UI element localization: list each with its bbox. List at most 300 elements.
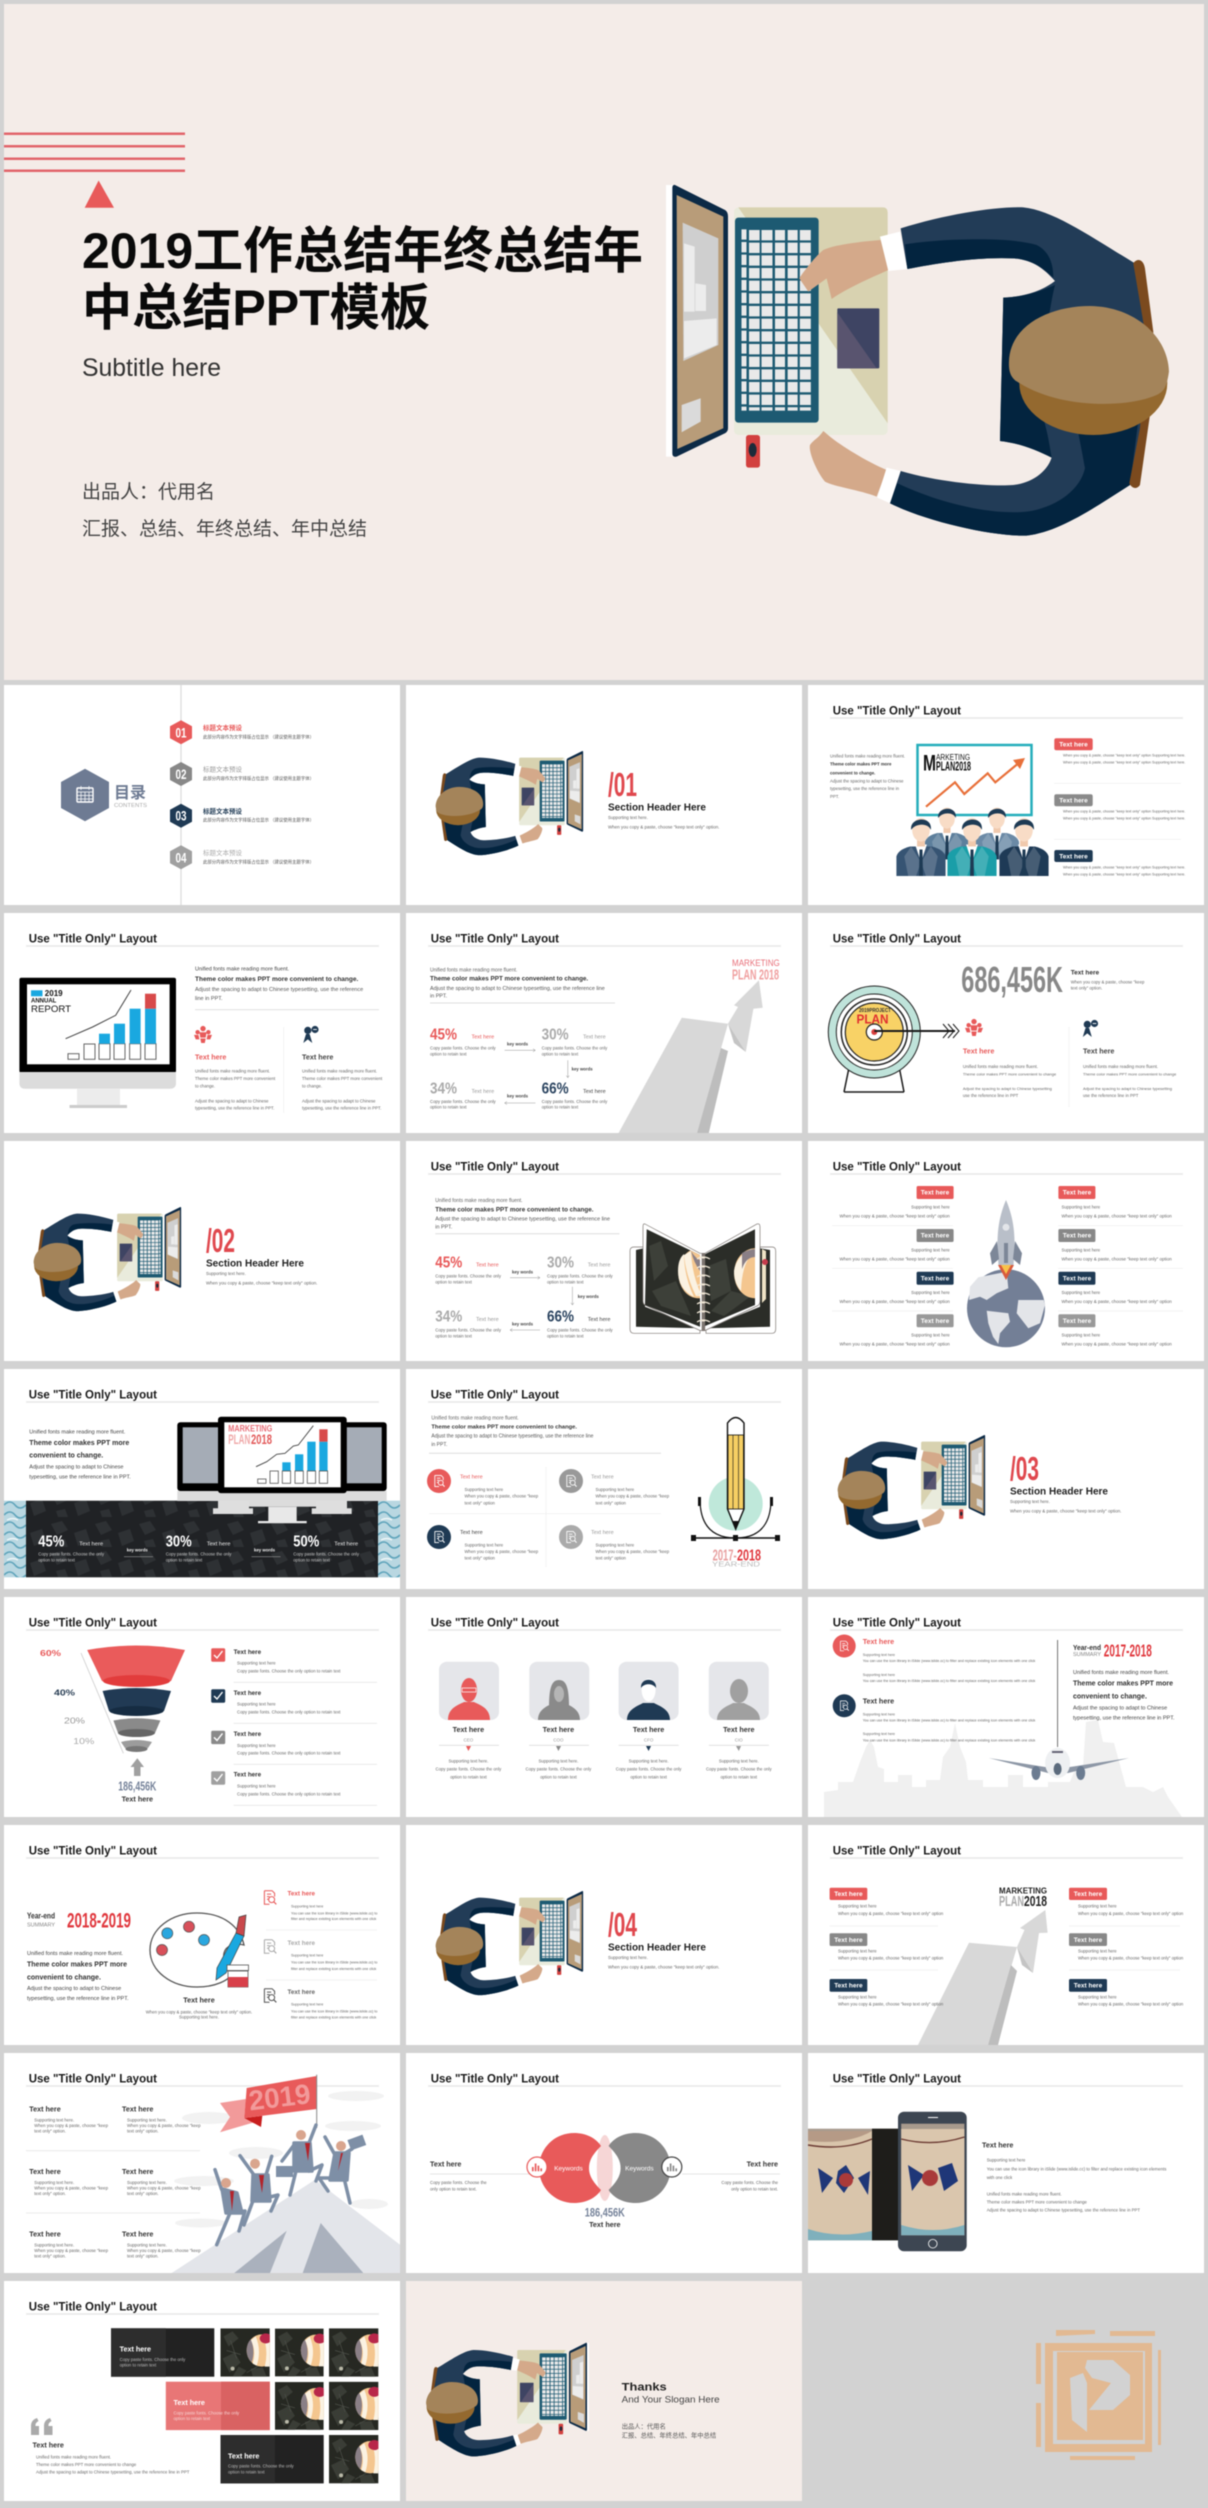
title: Use "Title Only" Layout (833, 933, 961, 945)
tile: dark 2 (220, 2435, 324, 2483)
year heading: SUMMARY (1073, 1652, 1102, 1658)
title: 2019工作总结年终总结年 (82, 223, 643, 279)
stat 30% (542, 1027, 608, 1056)
icon: up arrow (130, 1758, 144, 1776)
monitors illustration (177, 1417, 387, 1523)
keyword shapes: Keywords (554, 2165, 584, 2172)
profile CFO: Copy paste fonts. Choose the only (616, 1766, 682, 1771)
skyline (824, 1720, 1182, 1817)
tile: red: Text here (174, 2398, 205, 2407)
body text: typesetting, use the reference line in (830, 786, 900, 791)
panel: notebook stats (406, 1141, 802, 1361)
item 2: Supporting text here (291, 1954, 323, 1958)
item row 1 right: When you copy & paste, choose "keep (127, 2123, 201, 2128)
item 3: When you copy & paste, choose "keep text only" option Supporting text here. (1063, 873, 1185, 877)
right item 1 (1069, 1888, 1184, 1916)
item 2: When you copy & paste, choose "keep text only" option Supporting text here. (1063, 809, 1185, 813)
quote text: Theme color makes PPT more convenient to change (36, 2462, 137, 2467)
right item 3: When you copy & paste, choose "keep text only" option (1062, 1299, 1172, 1304)
check 2: Text here (234, 1690, 262, 1697)
section heading (206, 1222, 318, 1285)
panel: arrow with side items (808, 1825, 1204, 2045)
keyword shapes: Keywords (625, 2165, 654, 2172)
title: Use "Title Only" Layout (29, 1617, 157, 1629)
block navy: You can use the icon library in iSlide (www.islide.cc) to filter and replace existing icon elements with one click (863, 1738, 1036, 1742)
stat 30% (166, 1534, 232, 1563)
block red: You can use the icon library in iSlide (www.islide.cc) to filter and replace existing icon elements with one click (863, 1659, 1036, 1663)
target illustration: 2019PROJECT (859, 1008, 891, 1014)
palette caption (146, 1995, 252, 2020)
side text: typesetting, use the reference line in PPT. (1073, 1715, 1175, 1721)
column 2: use the reference line in PPT (1083, 1093, 1139, 1098)
intro text: in PPT. (435, 1224, 452, 1230)
chart board: M (923, 751, 936, 776)
section heading: Section Header Here (608, 1943, 706, 1954)
year-end mark: 2018 (737, 1547, 761, 1564)
stat 30%: 30% (542, 1027, 569, 1044)
funnel labels: 40% (54, 1688, 76, 1698)
stat 45%: 45% (38, 1534, 64, 1551)
intro text: Theme color makes PPT more convenient to change. (195, 976, 358, 983)
section heading: /03 (1010, 1450, 1039, 1487)
title (82, 223, 643, 336)
logo: marketing plan: 2018 (1024, 1893, 1047, 1910)
left item 1: Text here (834, 1891, 863, 1898)
item row 3 left: Text here (29, 2229, 61, 2238)
big number: 686,456K (961, 959, 1063, 1000)
left item 1 (830, 1888, 944, 1916)
stat 34%: 34% (435, 1309, 462, 1326)
right note: only option to retain text. (731, 2186, 778, 2191)
check 1: Copy paste fonts. Choose the only option to retain text (237, 1669, 341, 1674)
quote text: Unified fonts make reading more fluent. (36, 2455, 111, 2460)
intro text: Unified fonts make reading more fluent. (195, 966, 289, 972)
left item 1: When you copy & paste, choose "keep text only" option (840, 1213, 950, 1218)
stat 34%: Copy paste fonts. Choose the only (430, 1099, 497, 1104)
panel: marketing plan team (808, 685, 1204, 905)
item row 3 right: When you copy & paste, choose "keep (127, 2248, 201, 2253)
item red: When you copy & paste, choose "keep (464, 1494, 539, 1499)
profile CIO (706, 1662, 772, 1779)
column 2: Adjust the spacing to adapt to Chinese typesetting (1083, 1086, 1172, 1091)
title: Use "Title Only" Layout (29, 2073, 157, 2085)
item row 2 left: When you copy & paste, choose "keep (34, 2186, 109, 2190)
item gray (559, 1469, 670, 1505)
funnel labels: 10% (73, 1736, 95, 1746)
rocket and globe illustration (967, 1200, 1045, 1347)
item gray 2: When you copy & paste, choose "keep (596, 1549, 670, 1554)
left item 2: Supporting text here (838, 1949, 877, 1954)
key word arrows (124, 1548, 280, 1557)
left item 4: Supporting text here (911, 1333, 950, 1338)
item gray: text only" option (596, 1500, 627, 1505)
item 03: 此部分内容作为文字排版占位显示 （建议使用主题字体） (203, 817, 314, 824)
text: Adjust the spacing to adapt to Chinese typesetting, use the reference line in PPT (987, 2207, 1140, 2212)
item 3: Text here (288, 1989, 316, 1996)
title: Use "Title Only" Layout (431, 2073, 559, 2085)
year heading: SUMMARY (27, 1923, 56, 1929)
profile CEO: CEO (464, 1738, 474, 1743)
item gray: When you copy & paste, choose "keep (596, 1494, 670, 1499)
icon: red triangle (85, 180, 114, 208)
stat 50%: 50% (293, 1534, 319, 1551)
title: Use "Title Only" Layout (431, 933, 559, 945)
intro text (431, 1416, 594, 1448)
section heading: /04 (608, 1906, 637, 1943)
right item 1: Text here (1074, 1891, 1103, 1898)
item 3 (264, 1989, 377, 2019)
right item 4: When you copy & paste, choose "keep text only" option (1062, 1342, 1172, 1347)
illustration: person at laptop (436, 1891, 585, 1995)
climbers heads and ties (221, 2130, 366, 2211)
monitor illustration: ANNUAL (31, 999, 57, 1005)
check 3: Supporting text here (237, 1743, 276, 1748)
stat 45%: 45% (435, 1254, 462, 1271)
tile: dark 1: option to retain text (120, 2363, 157, 2368)
side text: convenient to change. (1073, 1693, 1147, 1700)
profile COO: Copy paste fonts. Choose the only (526, 1766, 592, 1771)
chart board: PLAN2018 (936, 760, 971, 774)
year-end mark: YEAR-END (712, 1559, 761, 1568)
funnel total: Text here (122, 1794, 153, 1803)
tile: dark 1: Text here (120, 2345, 151, 2354)
profile CIO: option to retain text (721, 1774, 758, 1779)
check 2 (211, 1689, 341, 1715)
check 3: Text here (234, 1731, 262, 1738)
year-end mark (712, 1547, 761, 1568)
column 2: Unified fonts make reading more fluent. (302, 1069, 377, 1074)
stat 30%: Text here (588, 1263, 610, 1269)
item row 3 right: text only" option. (127, 2254, 159, 2258)
item row 2 right: Text here (122, 2167, 153, 2176)
column 1: Theme color makes PPT more convenient (195, 1076, 276, 1081)
section heading: When you copy & paste, choose "keep text only" option. (206, 1280, 318, 1285)
intro text (435, 1198, 610, 1230)
intro text: Adjust the spacing to adapt to Chinese (27, 1986, 121, 1992)
profile CIO: CIO (735, 1738, 743, 1743)
stat 34% (435, 1309, 502, 1339)
section heading: Section Header Here (1010, 1487, 1108, 1498)
item 2: Text here (288, 1940, 316, 1947)
column 1: use the reference line in PPT (963, 1093, 1019, 1098)
check 3: Copy paste fonts. Choose the only option to retain text (237, 1751, 341, 1756)
key word arrows: key words (507, 1094, 529, 1099)
panel: phone photo (808, 2053, 1204, 2273)
chart board (918, 745, 1032, 815)
item 3: filter and replace existing icon elements with one click (291, 2015, 376, 2019)
stat 66%: Copy paste fonts. Choose the only (542, 1099, 608, 1104)
item 1: When you copy & paste, choose "keep text only" option Supporting text here. (1063, 761, 1185, 765)
column 1: Unified fonts make reading more fluent. (963, 1064, 1038, 1069)
intro text: Theme color makes PPT more (29, 1440, 129, 1447)
section heading: /02 (206, 1222, 235, 1259)
block navy: Supporting text here (863, 1732, 895, 1736)
column 2: to change. (302, 1083, 322, 1088)
presenter text: 汇报、总结、年终总结、年中总结 (82, 518, 367, 540)
column 1 (195, 1052, 276, 1110)
panel: annual report (4, 913, 400, 1133)
section heading (1010, 1450, 1122, 1513)
panel: percentages with arrow (406, 913, 802, 1133)
tile: dark 2: Copy paste fonts. Choose the only (228, 2464, 295, 2469)
item 01: 01 (176, 724, 187, 740)
intro text: Theme color makes PPT more (27, 1962, 127, 1969)
column 1: Adjust the spacing to adapt to Chinese (195, 1098, 269, 1103)
presenter text: 出品人：代用名 (82, 481, 215, 503)
profile COO: option to retain text (540, 1774, 577, 1779)
monitors illustration: 2018 (251, 1431, 272, 1447)
intro text: Adjust the spacing to adapt to Chinese (29, 1464, 123, 1470)
side text: Adjust the spacing to adapt to Chinese (1073, 1705, 1167, 1711)
item row 1 left (29, 2104, 109, 2133)
subtitle: Subtitle here (82, 354, 221, 382)
text: Unified fonts make reading more fluent. (987, 2191, 1062, 2196)
stat 30%: Copy paste fonts. Choose the only (166, 1552, 232, 1557)
left item 1 (840, 1186, 954, 1218)
intro text: Unified fonts make reading more fluent. (431, 1416, 519, 1422)
block navy: Supporting text here (863, 1712, 895, 1716)
item 1: Text here (1059, 742, 1088, 749)
panel: section 01 (406, 685, 802, 905)
profile CEO: Supporting text here. (448, 1758, 488, 1763)
stat 50% (293, 1534, 360, 1563)
side text: Theme color makes PPT more (1073, 1681, 1173, 1688)
panel: thanks slide (406, 2281, 802, 2501)
stat 34%: option to retain text (435, 1334, 473, 1339)
column 2 (1083, 1047, 1177, 1098)
column 2 (302, 1052, 383, 1110)
arrow graphic (918, 1910, 1048, 2045)
funnel total (118, 1779, 157, 1803)
item gray 2: text only" option (596, 1555, 627, 1560)
right item 4: Text here (1063, 1318, 1092, 1325)
intro text (27, 1951, 129, 2002)
column 1 (963, 1047, 1057, 1098)
column 2: Adjust the spacing to adapt to Chinese (302, 1098, 376, 1103)
stat 50%: Text here (334, 1542, 358, 1548)
left note: Copy paste fonts. Choose the (430, 2180, 487, 2185)
item row 3 left: Supporting text here. (34, 2242, 74, 2248)
profile CFO: Text here (633, 1725, 664, 1734)
left item 2 (830, 1933, 944, 1960)
funnel total: 186,456K (118, 1779, 157, 1794)
block navy (833, 1694, 1036, 1742)
palette caption: Supporting text here. (179, 2015, 219, 2020)
stat 45%: option to retain text (430, 1051, 467, 1056)
chart board: ARKETING (936, 752, 970, 762)
stat 66%: Text here (583, 1089, 606, 1095)
stat 66% (542, 1081, 608, 1110)
stat 45% (430, 1027, 497, 1056)
check 4 (211, 1771, 341, 1797)
intro text: Adjust the spacing to adapt to Chinese typesetting, use the reference line (435, 1217, 610, 1223)
panel: contents slide (4, 685, 400, 905)
logo: marketing plan: MARKETING (999, 1886, 1047, 1895)
right item 1: Supporting text here (1062, 1204, 1101, 1209)
logo: marketing plan: PLAN (999, 1893, 1024, 1910)
year heading (27, 1908, 131, 1932)
logo: marketing plan (732, 958, 780, 983)
intro text: Theme color makes PPT more convenient to change. (435, 1207, 594, 1214)
panel: section 03 (808, 1369, 1204, 1589)
item 1: You can use the icon library in iSlide (www.islide.cc) to (291, 1911, 377, 1915)
block red: You can use the icon library in iSlide (www.islide.cc) to filter and replace existing icon elements with one click (863, 1679, 1036, 1683)
profile CEO: Text here (453, 1725, 484, 1734)
thanks text: 汇报、总结、年终总结、年中总结 (622, 2430, 716, 2439)
block red: Supporting text here (863, 1653, 895, 1657)
body text: Unified fonts make reading more fluent. (830, 753, 905, 758)
item row 3 left (29, 2229, 109, 2258)
stat 45%: option to retain text (38, 1558, 76, 1563)
block red: Supporting text here (863, 1673, 895, 1677)
photo left (808, 2129, 898, 2240)
profile CEO (436, 1662, 502, 1779)
stat 66% (547, 1309, 614, 1339)
right item 1: Supporting text here (1078, 1904, 1117, 1909)
intro text: Adjust the spacing to adapt to Chinese typesetting, use the reference line (430, 986, 605, 992)
notebook illustration (630, 1224, 776, 1333)
section heading: Supporting text here. (1010, 1499, 1050, 1504)
tile: dark 2: Text here (228, 2451, 259, 2460)
left item 3: When you copy & paste, choose "keep text only" option (838, 2002, 944, 2007)
text: Text here (982, 2140, 1013, 2149)
title: Use "Title Only" Layout (29, 2301, 157, 2313)
right item 1: When you copy & paste, choose "keep text only" option (1062, 1213, 1172, 1218)
left item 4: Text here (921, 1318, 950, 1325)
stat 30%: Text here (583, 1035, 606, 1041)
item 03 (170, 804, 314, 828)
intro text: Unified fonts make reading more fluent. (27, 1951, 123, 1957)
item row 3 right: Text here (122, 2229, 153, 2238)
check 1: Supporting text here (237, 1661, 276, 1666)
column 2: typesetting, use the reference line in PPT. (302, 1105, 381, 1110)
number note: text only" option. (1071, 985, 1102, 990)
stat 50%: Copy paste fonts. Choose the only (293, 1552, 360, 1557)
right item 2: Text here (1074, 1937, 1103, 1944)
panel: plane and skyline (808, 1597, 1204, 1817)
left item 2: Supporting text here (911, 1247, 950, 1252)
panel: section 04 (406, 1825, 802, 2045)
stat 45%: 45% (430, 1027, 457, 1044)
stat 34%: Text here (472, 1089, 494, 1095)
title: Use "Title Only" Layout (833, 1845, 961, 1857)
arrow graphic (619, 980, 763, 1133)
item 02: 此部分内容作为文字排版占位显示 （建议使用主题字体） (203, 775, 314, 782)
section heading: Supporting text here. (206, 1271, 246, 1276)
item row 3 right (122, 2229, 201, 2258)
intro text: Unified fonts make reading more fluent. (29, 1429, 126, 1435)
panel: monitors on dark band (4, 1369, 400, 1589)
logo: marketing plan (999, 1886, 1047, 1910)
item 01: 此部分内容作为文字排版占位显示 （建议使用主题字体） (203, 733, 314, 740)
item 3: When you copy & paste, choose "keep text only" option Supporting text here. (1063, 865, 1185, 869)
check 2: Supporting text here (237, 1702, 276, 1707)
section heading (608, 766, 720, 829)
stat 34%: Copy paste fonts. Choose the only (435, 1328, 502, 1333)
icon: red group (965, 1019, 983, 1036)
target illustration: PLAN (856, 1012, 888, 1027)
heading: contents: CONTENTS (114, 803, 147, 809)
column 1: Unified fonts make reading more fluent. (195, 1069, 270, 1074)
item row 1 left: Text here (29, 2104, 61, 2113)
profile COO: Text here (543, 1725, 574, 1734)
intro text: Unified fonts make reading more fluent. (435, 1198, 523, 1204)
stat 30% (547, 1254, 614, 1284)
title: Use "Title Only" Layout (29, 1845, 157, 1857)
pencil illustration (691, 1418, 780, 1541)
panel: pencil (406, 1369, 802, 1589)
block navy: You can use the icon library in iSlide (www.islide.cc) to filter and replace existing icon elements with one click (863, 1718, 1036, 1722)
stat 34%: Text here (476, 1317, 499, 1323)
section heading: When you copy & paste, choose "keep text only" option. (608, 1964, 720, 1969)
column 1: typesetting, use the reference line in PPT. (195, 1105, 274, 1110)
item gray: Supporting text here (596, 1487, 635, 1492)
text: You can use the icon library in iSlide (www.islide.cc) to filter and replace existing icon elements (987, 2166, 1166, 2171)
item 1: Text here (288, 1891, 316, 1898)
stat 30%: option to retain text (547, 1279, 584, 1284)
intro text: line in PPT. (195, 996, 223, 1002)
right item 3 (1058, 1272, 1172, 1304)
intro text (29, 1429, 131, 1480)
item row 2 right: Supporting text here. (127, 2180, 167, 2185)
stat 45% (38, 1534, 105, 1563)
intro text: convenient to change. (27, 1974, 101, 1981)
tile: red (166, 2382, 270, 2430)
profile CEO: option to retain text (450, 1774, 487, 1779)
panel: summit 2019 (4, 2053, 400, 2273)
stat 30%: Text here (207, 1542, 231, 1548)
item row 1 right: Supporting text here. (127, 2118, 167, 2123)
title: Use "Title Only" Layout (833, 1161, 961, 1173)
stat 45%: Copy paste fonts. Choose the only (430, 1046, 497, 1051)
plane illustration (989, 1640, 1129, 1780)
intro text (195, 966, 363, 1002)
intro text: Unified fonts make reading more fluent. (430, 967, 517, 973)
year-end mark: 2017- (713, 1547, 737, 1564)
left item 3: Supporting text here (911, 1290, 950, 1295)
item row 2 left: text only" option. (34, 2191, 66, 2196)
item 3 (1054, 850, 1185, 877)
profile COO (526, 1662, 592, 1779)
watermark stamp (1036, 2330, 1161, 2460)
left item 1: When you copy & paste, choose "keep text only" option (838, 1911, 944, 1916)
right item 2: Text here (1063, 1233, 1092, 1240)
stat 45%: Copy paste fonts. Choose the only (435, 1273, 502, 1278)
title: 中总结PPT模板 (82, 280, 430, 336)
stat 45%: Text here (79, 1542, 103, 1548)
item navy: Supporting text here (464, 1542, 504, 1547)
intro text: in PPT. (430, 993, 447, 999)
palette illustration (150, 1913, 248, 1987)
profile CIO: Supporting text here. (719, 1758, 759, 1763)
target illustration (828, 986, 959, 1092)
item gray 2 (559, 1525, 670, 1560)
palette caption: Text here (183, 1995, 215, 2004)
text (982, 2140, 1166, 2212)
flag (220, 2075, 317, 2132)
stat 66%: option to retain text (547, 1334, 584, 1339)
stat 45%: Text here (476, 1263, 499, 1269)
quote text (32, 2441, 190, 2475)
key word arrows: key words (512, 1269, 534, 1274)
panel: palette (4, 1825, 400, 2045)
column 1: Adjust the spacing to adapt to Chinese typesetting (963, 1086, 1052, 1091)
right item 2 (1058, 1229, 1172, 1261)
quote text: Text here (32, 2441, 64, 2450)
number note: When you copy & paste, choose "keep (1071, 980, 1145, 985)
section heading: Section Header Here (608, 803, 706, 814)
stat 45% (435, 1254, 502, 1284)
